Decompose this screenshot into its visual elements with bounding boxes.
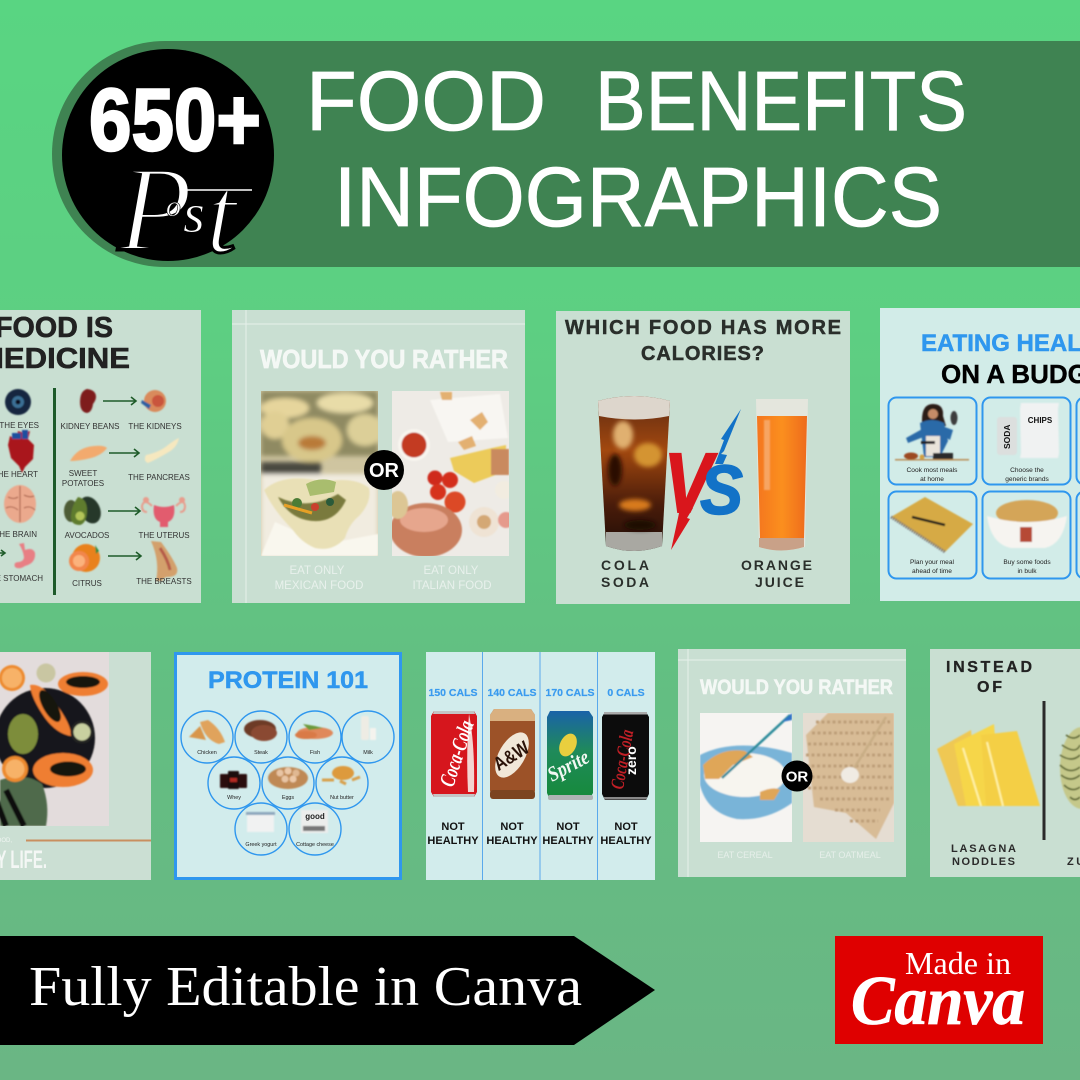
heading: WHICH FOOD HAS MORE (565, 317, 841, 339)
captions: EAT CEREAL (717, 850, 773, 860)
verdict labels: NOT (441, 821, 465, 833)
heading (922, 334, 1080, 384)
labels: JUICE (755, 574, 804, 590)
protein food icons (189, 716, 376, 833)
badge: 650+ Post (62, 49, 274, 277)
or badge: OR (786, 768, 808, 786)
icon: orange juice glass (756, 399, 808, 550)
icon: notebook (891, 497, 973, 552)
captions: MEXICAN FOOD (275, 580, 363, 592)
photo: italian food (388, 391, 514, 557)
verdict labels: HEALTHY (600, 835, 652, 847)
circle labels: Nut butter (330, 795, 354, 801)
heading: PROTEIN 101 (208, 667, 368, 694)
circle labels: Eggs (282, 795, 294, 801)
icon: coca-cola can: Coca-Cola (434, 717, 479, 790)
card captions: in bulk (1017, 568, 1037, 575)
icon: a&w can: A&W (490, 738, 533, 776)
panel: eating healthy on a budget (880, 308, 1080, 601)
icon: sprite can: Sprite (543, 745, 593, 786)
icon: vs bolt (664, 409, 743, 550)
circle labels: Milk (363, 750, 373, 756)
panel: would you rather, mexican or italian (232, 310, 525, 603)
verdict labels (427, 821, 652, 847)
icon: soda and chips: CHIPS (1028, 416, 1053, 425)
card captions: generic brands (1005, 476, 1050, 483)
panel: soda calories (426, 652, 655, 880)
labels (952, 844, 1080, 865)
captions (717, 850, 881, 860)
cards (888, 398, 1080, 578)
panel: instead of (930, 649, 1080, 877)
icon: coke zero can: zero (623, 746, 639, 775)
icon: cola glass (598, 396, 670, 551)
icons: organs and foods (4, 389, 185, 581)
verdict labels: NOT (500, 821, 524, 833)
panel: food is medicine (0, 310, 201, 603)
labels: LASAGNA (951, 843, 1016, 855)
verdict labels: HEALTHY (427, 835, 479, 847)
circle labels: Steak (254, 750, 268, 756)
card captions: ahead of time (912, 568, 952, 575)
verdict labels: HEALTHY (542, 835, 594, 847)
icon: coca-cola can (431, 711, 479, 797)
icon: a&w can (488, 709, 536, 799)
heading: INSTEAD (946, 659, 1032, 676)
heading: WOULD YOU RATHER (700, 676, 893, 699)
circle labels: Chicken (197, 750, 217, 756)
labels (601, 557, 812, 590)
labels: COLA (601, 557, 649, 573)
verdict labels: NOT (556, 821, 580, 833)
icon: coke zero can: Coca-Cola (607, 728, 638, 791)
panel: papaya photo (0, 652, 151, 880)
or badge (782, 760, 812, 792)
labels: SWEET (69, 469, 97, 478)
heading: WOULD YOU RATHER (260, 344, 508, 374)
icon: zucchini noodles (1060, 727, 1080, 809)
badge: made in canva: Made in (905, 945, 1011, 981)
badge: 650+ Post: P (117, 142, 193, 277)
labels (0, 421, 192, 588)
title: INFOGRAPHICS (334, 150, 942, 244)
panel: which food has more calories (556, 311, 850, 604)
title: BENEFITS (595, 54, 967, 148)
labels: THE EYES (0, 421, 39, 430)
heading: CALORIES? (641, 343, 764, 365)
title: FOOD (306, 54, 546, 148)
circle labels: Fish (310, 750, 320, 756)
or badge: OR (369, 460, 400, 482)
captions: EAT ONLY (290, 565, 345, 577)
icon: sprite can (543, 711, 593, 800)
calorie labels (428, 687, 645, 699)
card captions: at home (920, 476, 944, 483)
heading: OF (977, 679, 1002, 696)
labels: KIDNEY BEANS (61, 422, 119, 431)
badge: 650+ Post: s (183, 183, 205, 245)
badge: 650+ Post: o (166, 190, 181, 223)
heading (565, 317, 841, 365)
icon: coke zero can (602, 712, 649, 800)
icon: vs bolt: V (664, 436, 717, 530)
labels: AVOCADOS (65, 531, 109, 540)
labels: THE KIDNEYS (128, 422, 182, 431)
calorie labels: 150 CALS (428, 687, 478, 699)
labels: POTATOES (62, 479, 104, 488)
calorie labels: 140 CALS (487, 687, 537, 699)
circle labels: Whey (227, 795, 241, 801)
calorie labels: 0 CALS (607, 687, 645, 699)
circle labels: Greek yogurt (245, 842, 277, 848)
labels: CITRUS (72, 579, 102, 588)
captions: EAT ONLY (424, 565, 479, 577)
circle labels (197, 750, 373, 848)
badge: 650+ Post: 650+ (89, 70, 261, 169)
caption text (0, 838, 151, 868)
arrows (0, 397, 141, 560)
title (306, 54, 967, 244)
banner: fully editable in canva: Fully Editable in Canva (29, 956, 582, 1018)
heading (946, 660, 1032, 692)
panel: protein 101 (176, 654, 400, 878)
icon: vs bolt: S (700, 451, 743, 529)
icon: bowl of oats (987, 500, 1067, 548)
good label: good (305, 812, 325, 821)
icon: soda and chips (997, 403, 1059, 458)
card captions (907, 467, 1051, 575)
card captions: Plan your meal (910, 559, 955, 566)
photo: mexican food (261, 391, 383, 556)
photo: papaya plate (0, 652, 109, 826)
photo: oatmeal (803, 713, 894, 842)
circles (181, 711, 394, 855)
heading (0, 316, 130, 368)
icon: soda and chips: SODA (1002, 424, 1012, 449)
icon: lasagna (937, 724, 1040, 806)
photo: cereal bowl (700, 713, 792, 842)
header banner (52, 41, 1080, 277)
card captions: Choose the (1010, 467, 1044, 474)
badge: made in canva: Canva (851, 963, 1025, 1040)
labels: ORANGE (741, 557, 812, 573)
captions (275, 565, 492, 592)
circle labels: Cottage cheese (296, 842, 334, 848)
card captions: Buy some foods (1003, 559, 1051, 566)
captions: ITALIAN FOOD (412, 580, 492, 592)
banner: fully editable in canva (0, 936, 655, 1045)
calorie labels: 170 CALS (545, 687, 595, 699)
labels: SODA (601, 574, 649, 590)
labels: THE BREASTS (136, 577, 192, 586)
captions: EAT OATMEAL (819, 850, 881, 860)
verdict labels: HEALTHY (486, 835, 538, 847)
verdict labels: NOT (614, 821, 638, 833)
labels: THE UTERUS (138, 531, 190, 540)
icon: woman cooking (895, 404, 969, 460)
card captions: Cook most meals (907, 467, 958, 474)
badge: made in canva (835, 936, 1043, 1044)
panel: would you rather, cereal or oatmeal (678, 649, 906, 877)
labels: NODDLES (952, 856, 1015, 868)
labels: THE PANCREAS (128, 473, 190, 482)
badge: 650+ Post: t (206, 154, 239, 276)
or badge (364, 450, 404, 490)
